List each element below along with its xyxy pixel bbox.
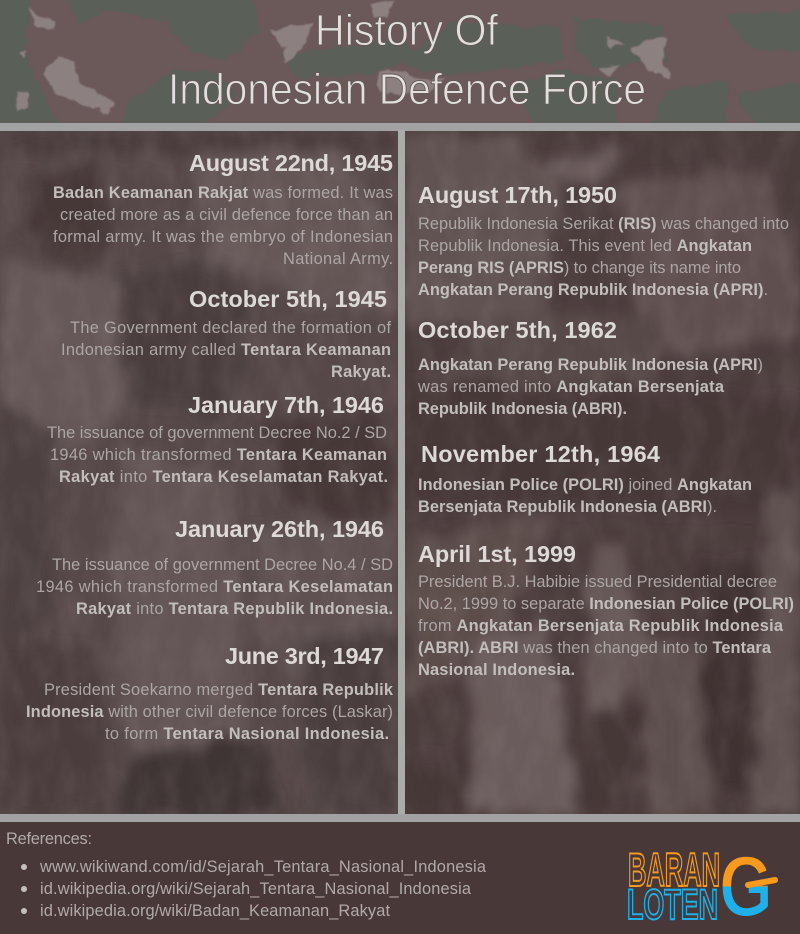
event: January 26th, 1946 <box>36 516 393 618</box>
logo: Barang Loteng: G <box>719 839 773 934</box>
description: Angkatan Perang Republik Indonesia (APRI) <box>418 356 763 374</box>
right photo panel <box>405 130 800 815</box>
description: The issuance of government Decree No.4 / SD <box>52 556 393 574</box>
description: Angkatan Perang Republik Indonesia (APRI). <box>418 281 768 299</box>
horizontal divider: top <box>0 123 800 131</box>
description: Perang RIS (APRIS) to change its name into <box>418 259 741 277</box>
event: October 5th, 1962 <box>417 317 763 418</box>
date: August 22nd, 1945 <box>189 150 393 176</box>
vertical divider <box>398 130 405 815</box>
description: Indonesian army called Tentara Keamanan <box>61 341 391 359</box>
description: Rakyat into Tentara Republik Indonesia. <box>76 600 393 618</box>
logo: Barang Loteng: BARAN <box>628 843 720 896</box>
description: Rakyat. <box>331 363 391 381</box>
description: National Army. <box>283 250 393 268</box>
title: Indonesian Defence Force <box>168 65 646 114</box>
date: October 5th, 1962 <box>418 317 617 343</box>
description: formal army. It was the embryo of Indonesian <box>53 228 393 246</box>
description <box>417 356 763 418</box>
title: History Of <box>315 6 499 55</box>
footer panel <box>0 822 800 934</box>
description: Republik Indonesia. This event led Angkatan <box>418 237 752 255</box>
date: October 5th, 1945 <box>189 286 387 312</box>
description: created more as a civil defence force than an <box>60 206 393 224</box>
description <box>418 215 789 299</box>
event: August 17th, 1950 <box>418 182 789 299</box>
description <box>53 184 393 268</box>
description: Indonesia with other civil defence forces (Laskar) <box>26 703 393 721</box>
description <box>418 573 794 679</box>
date: August 17th, 1950 <box>418 182 617 208</box>
description: to form Tentara Nasional Indonesia. <box>105 725 389 743</box>
date: November 12th, 1964 <box>421 441 660 467</box>
references heading: References: <box>6 830 92 848</box>
description <box>26 681 394 743</box>
reference list <box>21 858 487 920</box>
description: The issuance of government Decree No.2 / SD <box>47 424 387 442</box>
event: November 12th, 1964 <box>418 441 752 516</box>
date: January 26th, 1946 <box>175 516 384 542</box>
title <box>168 6 646 114</box>
event: October 5th, 1945 <box>61 286 391 381</box>
description: Republik Indonesia (ABRI). <box>418 400 627 418</box>
date: April 1st, 1999 <box>418 541 576 567</box>
description <box>61 319 391 381</box>
logo: Barang Loteng <box>627 839 775 934</box>
logo: Barang Loteng: LOTEN <box>627 881 718 929</box>
description: No.2, 1999 to separate Indonesian Police (POLRI) <box>418 595 794 613</box>
description: from Angkatan Bersenjata Republik Indonesia <box>418 617 784 635</box>
description: The Government declared the formation of <box>70 319 391 337</box>
description: (ABRI). ABRI was then changed into to Tentara <box>418 639 772 657</box>
reference list: id.wikipedia.org/wiki/Sejarah_Tentara_Nasional_Indonesia <box>40 880 472 898</box>
description: President Soekarno merged Tentara Republik <box>44 681 394 699</box>
description <box>47 424 388 486</box>
description: Bersenjata Republik Indonesia (ABRI). <box>418 498 717 516</box>
left photo panel <box>0 130 398 815</box>
event: January 7th, 1946 <box>47 392 388 486</box>
references <box>6 830 487 920</box>
description: was renamed into Angkatan Bersenjata <box>417 378 725 396</box>
description: Republik Indonesia Serikat (RIS) was changed into <box>418 215 789 233</box>
description: President B.J. Habibie issued Presidential decree <box>418 573 777 591</box>
reference list: www.wikiwand.com/id/Sejarah_Tentara_Nasional_Indonesia <box>39 858 487 876</box>
description <box>36 556 393 618</box>
event: April 1st, 1999 <box>418 541 794 679</box>
description: Indonesian Police (POLRI) joined Angkatan <box>418 476 752 494</box>
date: January 7th, 1946 <box>188 392 384 418</box>
reference list: id.wikipedia.org/wiki/Badan_Keamanan_Rakyat <box>40 902 390 920</box>
description: 1946 which transformed Tentara Keselamatan <box>36 578 393 596</box>
event: August 22nd, 1945 <box>53 150 393 268</box>
horizontal divider: bottom <box>0 814 800 822</box>
description <box>418 476 752 516</box>
date: June 3rd, 1947 <box>225 643 384 669</box>
description: Badan Keamanan Rakjat was formed. It was <box>53 184 393 202</box>
event: June 3rd, 1947 <box>26 643 394 743</box>
description: Rakyat into Tentara Keselamatan Rakyat. <box>59 468 388 486</box>
title banner: camouflage background <box>0 0 800 130</box>
description: 1946 which transformed Tentara Keamanan <box>50 446 387 464</box>
description: Nasional Indonesia. <box>418 661 575 679</box>
